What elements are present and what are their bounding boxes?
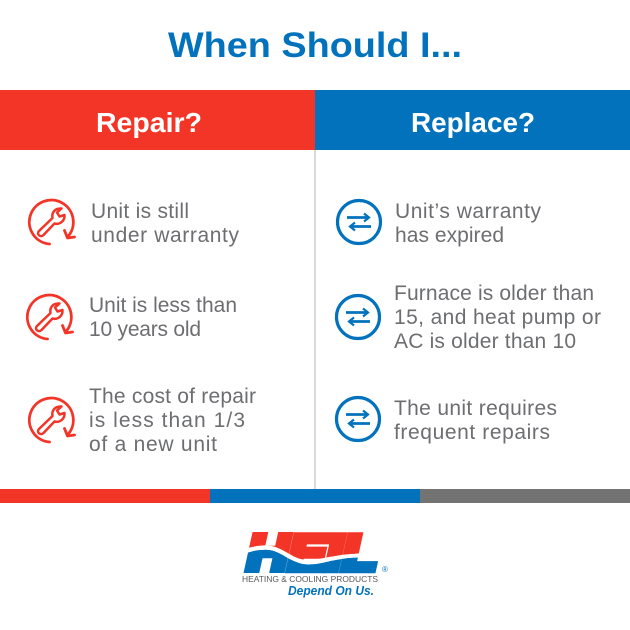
panel: repair items bbox=[27, 200, 256, 456]
logo bbox=[242, 532, 388, 598]
text: age: 10 years old bbox=[89, 318, 201, 341]
text: age limits bbox=[394, 282, 601, 353]
text: frequent repairs: The unit requires bbox=[394, 397, 557, 420]
icon: wrench 1 bbox=[29, 200, 74, 244]
icon: arrows 1 bbox=[338, 200, 380, 244]
icon: wrench 2 bbox=[27, 295, 72, 339]
logo: HEATING & COOLING PRODUCTS bbox=[242, 574, 378, 584]
text: frequent repairs bbox=[394, 397, 557, 444]
text: age bbox=[89, 294, 237, 341]
text: warranty bbox=[91, 200, 240, 247]
panel: repair header bbox=[0, 90, 315, 150]
text: expired: Unit’s warranty bbox=[395, 200, 542, 223]
text: expired: has expired bbox=[395, 224, 504, 247]
logo wordmark: HEIL bbox=[247, 525, 377, 581]
text: frequent repairs: frequent repairs bbox=[394, 421, 550, 444]
logo: Depend On Us. bbox=[288, 583, 374, 598]
text: cost bbox=[89, 385, 256, 456]
text: expired bbox=[395, 200, 542, 247]
text: cost: of a new unit bbox=[89, 433, 217, 456]
text: age limits: Furnace is older than bbox=[394, 282, 594, 305]
icon: wrench 3 bbox=[29, 398, 74, 442]
tricolor bar bbox=[0, 489, 630, 503]
panel: repair header: Repair? bbox=[96, 107, 202, 138]
panel: replace header: Replace? bbox=[411, 107, 535, 138]
text: age limits: AC is older than 10 bbox=[394, 330, 576, 353]
title: When Should I... bbox=[168, 26, 462, 65]
text: warranty: Unit is still bbox=[91, 200, 189, 223]
logo wordmark: HEIL bbox=[247, 525, 377, 581]
logo wordmark bbox=[244, 532, 378, 574]
icon: arrows 3 bbox=[336, 398, 380, 440]
text: cost: The cost of repair bbox=[89, 385, 256, 408]
panel: replace items bbox=[336, 200, 601, 444]
text: cost: is less than 1/3 bbox=[89, 409, 245, 432]
panel: replace header bbox=[315, 90, 630, 150]
logo: ® bbox=[382, 565, 388, 574]
text: age: Unit is less than bbox=[89, 294, 237, 317]
icon: arrows 2 bbox=[336, 296, 380, 338]
text: age limits: 15, and heat pump or bbox=[394, 306, 601, 329]
text: warranty: under warranty bbox=[91, 224, 240, 247]
